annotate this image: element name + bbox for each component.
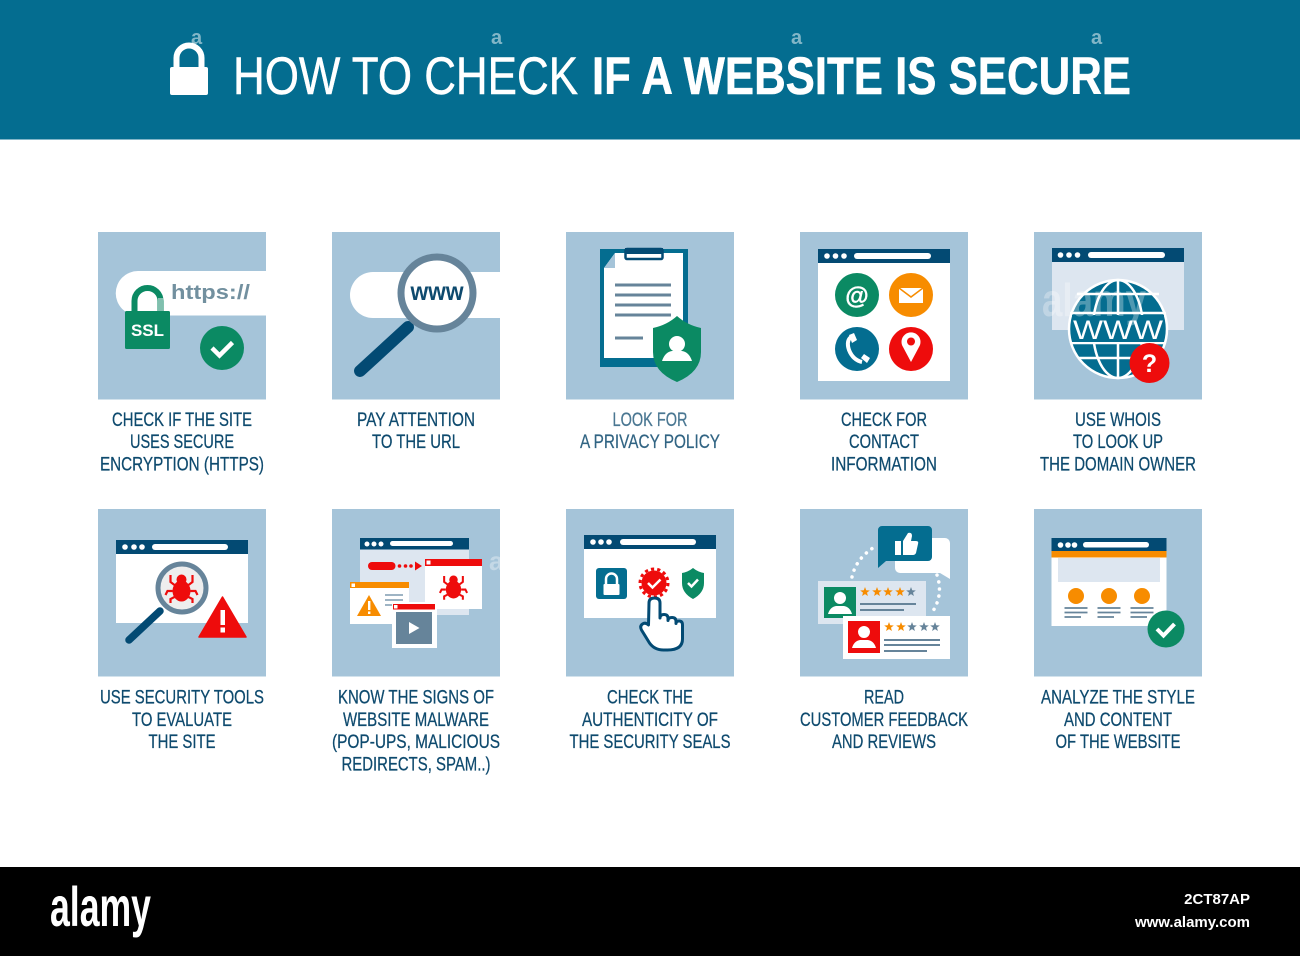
caption: LOOK FOR — [612, 410, 688, 431]
icon: red verified badge — [640, 569, 668, 597]
icon: pointing hand — [641, 598, 682, 650]
icon: magnifying glass with www — [360, 257, 473, 371]
caption: TO LOOK UP — [1073, 432, 1163, 453]
caption — [332, 688, 500, 776]
orange warning popup — [350, 582, 409, 624]
caption: CHECK IF THE SITE — [112, 410, 252, 431]
footer logo: alamy — [50, 875, 151, 938]
caption: USE SECURITY TOOLS — [100, 688, 264, 708]
panel: privacy policy — [566, 232, 734, 453]
caption: WEBSITE MALWARE — [343, 710, 489, 731]
icon: SSL padlock: SSL — [131, 321, 164, 340]
icon: green shield — [682, 568, 704, 599]
panel: URL — [332, 232, 500, 453]
caption: USE WHOIS — [1075, 410, 1161, 431]
icon: lock seal — [596, 568, 627, 599]
footer bar — [0, 867, 1300, 956]
title — [233, 47, 1131, 106]
caption: KNOW THE SIGNS OF — [338, 688, 494, 708]
panel: style and content — [1034, 509, 1202, 753]
icon: privacy shield — [653, 316, 701, 382]
icon: magnifier with bug — [129, 564, 206, 640]
watermark: alamy — [1042, 274, 1146, 326]
watermark: a — [489, 546, 504, 576]
caption: ANALYZE THE STYLE — [1041, 688, 1195, 708]
icon: globe www — [1069, 280, 1167, 378]
address bar with https: https:// — [171, 282, 251, 304]
icon: thumbs-up bubble — [878, 526, 932, 568]
watermark marks in header: a — [191, 27, 203, 49]
tile — [566, 232, 734, 400]
icon: question mark — [1130, 343, 1170, 383]
watermark marks in header: a — [491, 27, 503, 49]
tile — [98, 232, 266, 400]
caption: READ — [864, 688, 904, 708]
caption: CHECK FOR — [841, 410, 927, 431]
caption — [100, 410, 264, 476]
caption: CONTACT — [849, 432, 919, 453]
panel: customer feedback — [800, 509, 968, 753]
caption: ENCRYPTION (HTTPS) — [100, 454, 264, 476]
caption: CHECK THE — [607, 688, 693, 708]
image id and site — [1134, 891, 1250, 931]
address bar — [350, 272, 500, 318]
caption: A PRIVACY POLICY — [580, 432, 720, 453]
caption: AND REVIEWS — [832, 732, 936, 753]
tile — [566, 509, 734, 676]
caption: TO EVALUATE — [132, 710, 232, 731]
icon: green check — [1148, 610, 1184, 648]
icon: magnifying glass with www: www — [410, 278, 464, 306]
watermark marks in header: a — [791, 27, 803, 49]
icon: white speech bubble — [895, 538, 950, 579]
caption — [1040, 410, 1196, 476]
image id and site: 2CT87AP — [1184, 891, 1250, 908]
review card: four stars — [818, 581, 926, 624]
tile — [98, 509, 266, 676]
caption — [800, 688, 968, 753]
address bar with https — [116, 271, 266, 316]
browser window — [584, 535, 716, 618]
dotted connectors — [852, 546, 939, 614]
icon: email at — [835, 273, 879, 317]
caption — [580, 410, 720, 453]
caption: CUSTOMER FEEDBACK — [800, 710, 968, 731]
caption: THE SECURITY SEALS — [570, 732, 730, 753]
image id and site: www.alamy.com — [1134, 914, 1250, 931]
watermark marks in header — [191, 27, 1103, 49]
icon: padlock — [170, 46, 208, 95]
panel: secure encryption — [98, 232, 266, 476]
tile — [800, 509, 968, 676]
panel: website malware — [332, 509, 504, 776]
tile — [332, 232, 500, 400]
website layout window — [1052, 538, 1166, 626]
caption — [100, 688, 264, 753]
title: IF A WEBSITE IS SECURE — [592, 47, 1131, 106]
caption — [357, 410, 475, 453]
caption: REDIRECTS, SPAM..) — [342, 754, 490, 776]
caption: AND CONTENT — [1064, 710, 1172, 731]
caption: INFORMATION — [831, 454, 937, 476]
icon: green check — [200, 326, 244, 370]
icon: warning triangle — [199, 597, 246, 637]
tile — [800, 232, 968, 400]
tile — [332, 509, 500, 676]
caption — [831, 410, 937, 476]
icon: mail — [889, 273, 933, 317]
icon: question mark: ? — [1142, 350, 1157, 378]
icon: map pin — [889, 327, 933, 371]
caption — [1041, 688, 1195, 753]
review card: two stars — [843, 616, 950, 659]
icon: email at: @ — [845, 283, 869, 310]
caption: PAY ATTENTION — [357, 410, 475, 431]
watermark marks in header: a — [1091, 27, 1103, 49]
caption: OF THE WEBSITE — [1056, 732, 1180, 753]
browser window — [818, 249, 950, 381]
title: HOW TO CHECK — [233, 47, 578, 106]
header band — [0, 0, 1300, 140]
icon: phone — [835, 327, 879, 371]
panel: contact information — [800, 232, 968, 476]
panel: security tools — [98, 509, 266, 753]
caption: THE SITE — [148, 732, 216, 753]
video popup — [392, 602, 437, 648]
panel: security seals — [566, 509, 734, 753]
tile — [1034, 509, 1202, 676]
panel: WHOIS — [1034, 232, 1202, 476]
icon: globe www: WWW — [1073, 315, 1164, 345]
browser window — [1052, 248, 1184, 330]
caption — [570, 688, 730, 753]
red popup with bug — [425, 559, 482, 609]
caption: (POP-UPS, MALICIOUS — [332, 732, 500, 753]
icon: SSL padlock — [125, 288, 170, 349]
caption: TO THE URL — [372, 432, 460, 453]
icon: clipboard — [600, 248, 688, 367]
main browser window — [360, 538, 469, 615]
tile — [1034, 232, 1202, 400]
caption: THE DOMAIN OWNER — [1040, 454, 1196, 476]
caption: USES SECURE — [130, 432, 234, 453]
caption: AUTHENTICITY OF — [582, 710, 718, 731]
browser window — [116, 540, 248, 623]
